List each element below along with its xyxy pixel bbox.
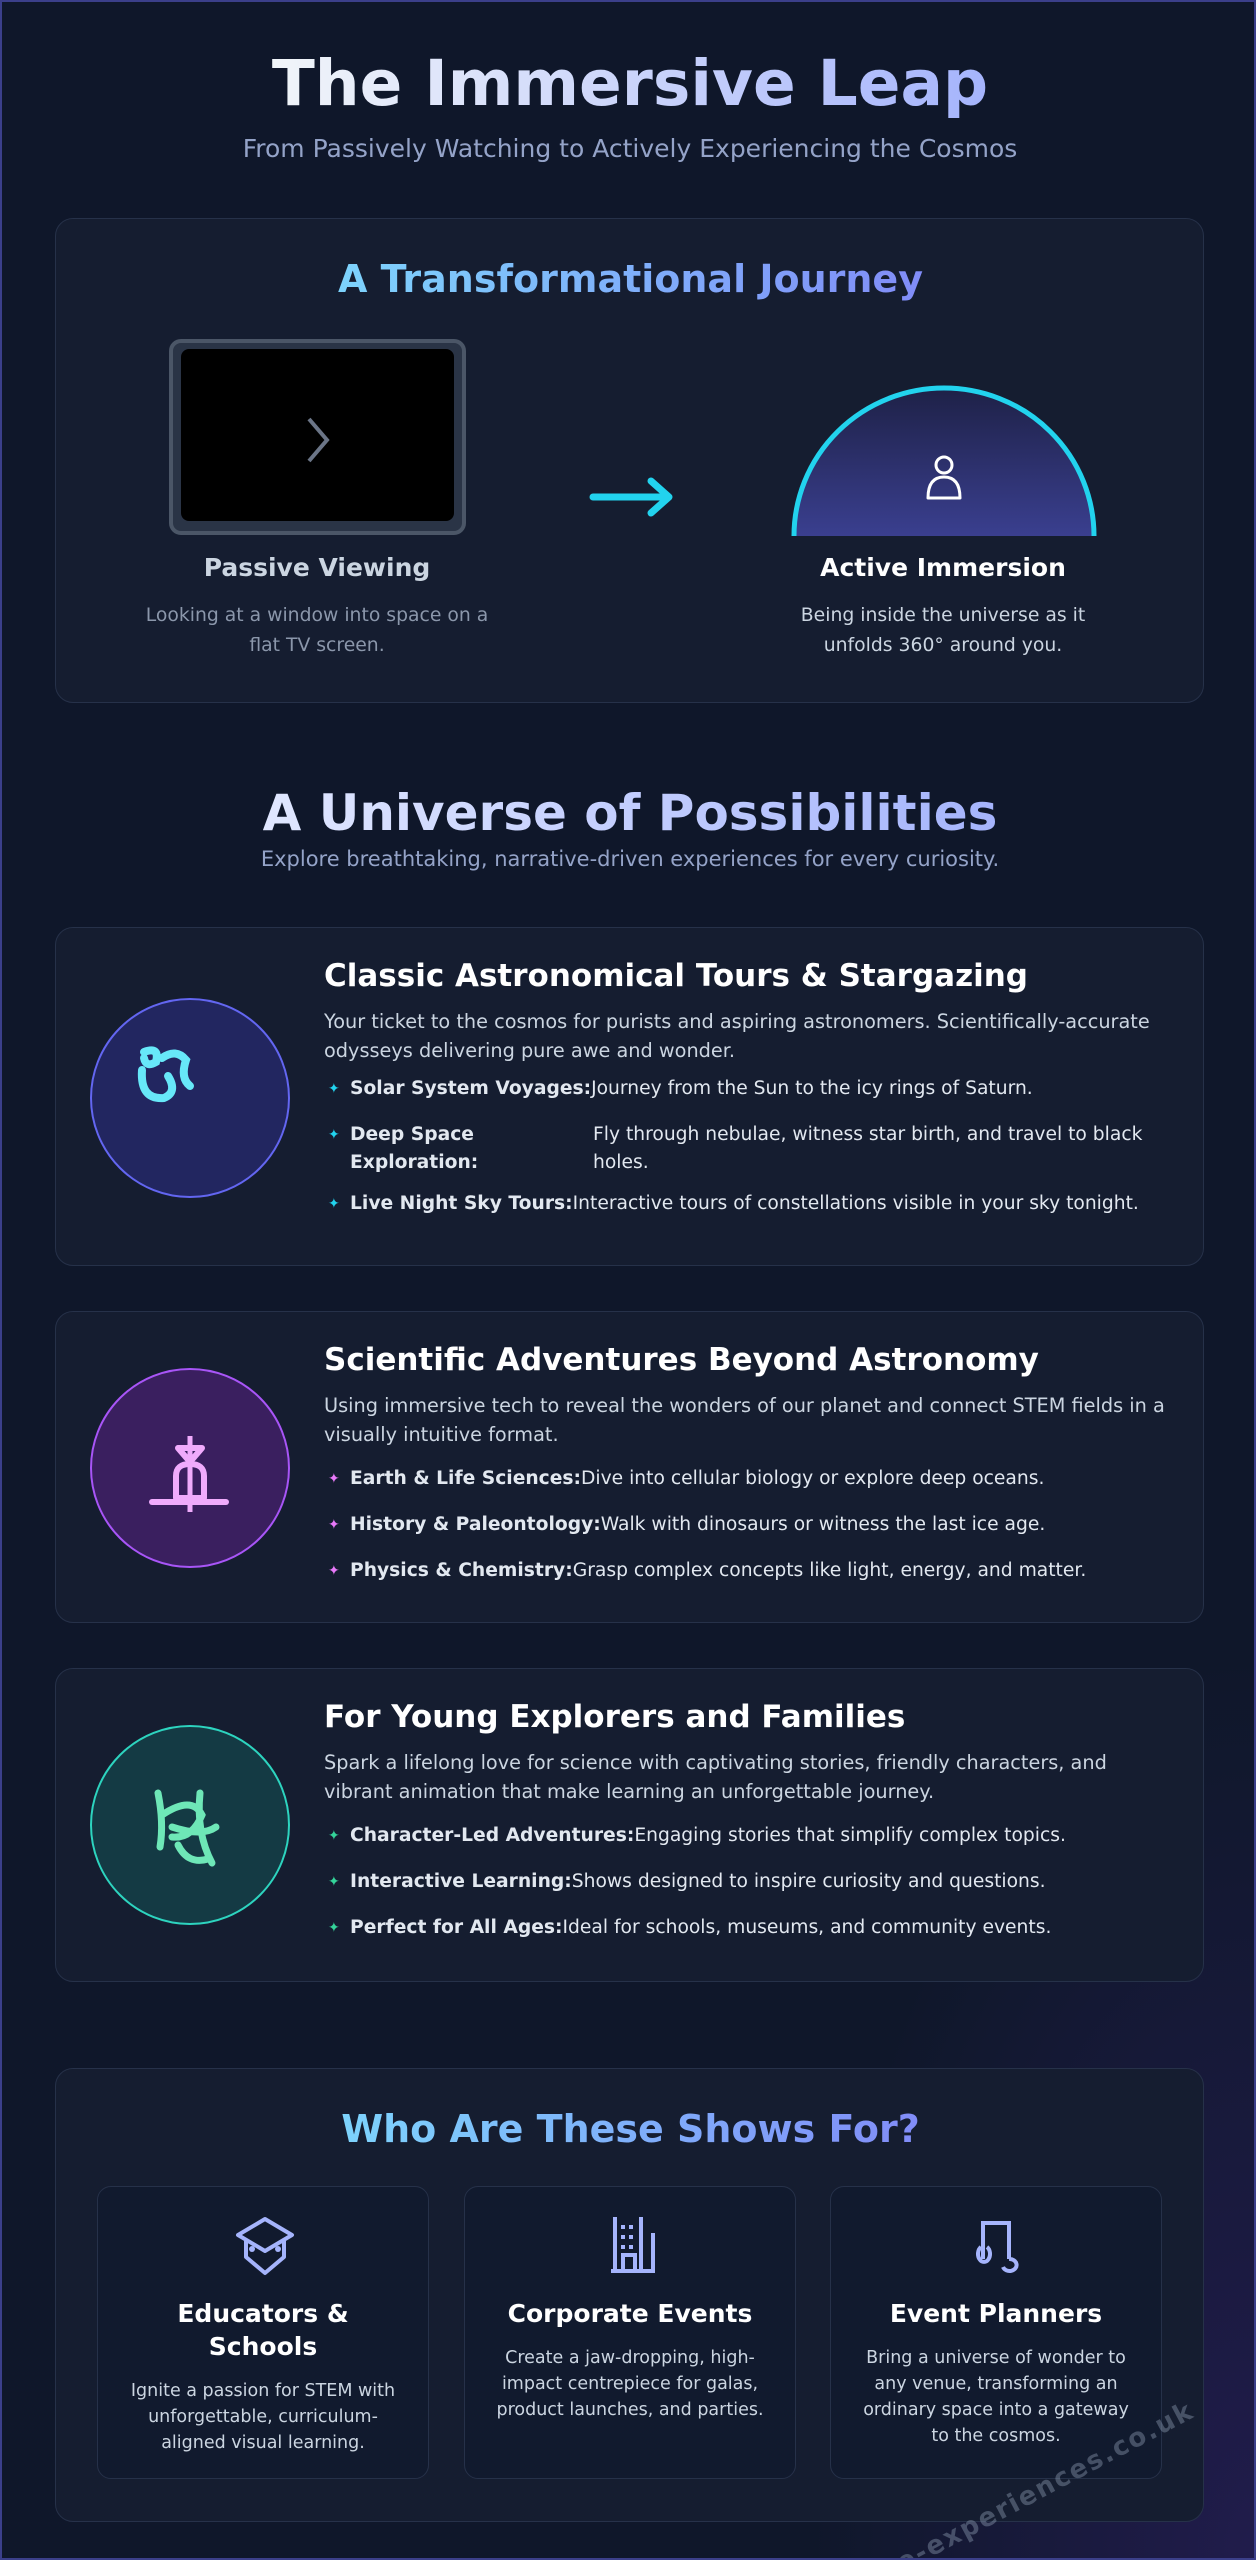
bullet: night sky <box>328 1193 1139 1214</box>
bullet: solar system: ✦ <box>328 1081 340 1097</box>
bullet: character-led: Engaging stories that simplify complex topics. <box>634 1825 1066 1846</box>
bullet: all ages: Perfect for All Ages: <box>350 1917 562 1938</box>
text: active description: Being inside the universe as it unfolds 360° around you. <box>801 605 1085 656</box>
heading: Who Are These Shows For? <box>341 2107 920 2151</box>
bullet: character-led <box>328 1825 1066 1846</box>
bullet: history <box>328 1514 1045 1535</box>
bullet: deep space: Fly through nebulae, witness star birth, and travel to black holes. <box>593 1124 1142 1173</box>
label: passive viewing: Passive Viewing <box>204 553 430 582</box>
bullet: earth <box>328 1468 1044 1489</box>
panel: scientific adventures <box>55 1311 1204 1623</box>
bullet: solar system: Journey from the Sun to the icy rings of Saturn. <box>591 1078 1033 1099</box>
bullet: deep space: Deep Space Exploration: <box>350 1124 478 1173</box>
icon: music note <box>976 2221 1019 2273</box>
bullet: history: History & Paleontology: <box>350 1514 601 1535</box>
panel: classic astronomical tours <box>55 927 1204 1266</box>
bullet: character-led: ✦ <box>328 1828 340 1844</box>
text: passive description: Looking at a window into space on a flat TV screen. <box>146 605 488 656</box>
bullet list <box>328 1468 1086 1581</box>
bullet: night sky: Live Night Sky Tours: <box>350 1193 573 1214</box>
description: Create a jaw-dropping, high-impact centrepiece for galas, product launches, and parties. <box>496 2348 764 2420</box>
bullet: physics <box>328 1560 1086 1581</box>
panel: who are these shows for <box>55 2068 1204 2522</box>
arrow <box>590 478 672 516</box>
card description: Your ticket to the cosmos for purists and aspiring astronomers. Scientifically-accurate odysseys delivering pure awe and wonder. <box>324 1010 1150 1062</box>
title: Event Planners <box>890 2299 1102 2328</box>
description: Bring a universe of wonder to any venue, transforming an ordinary space into a gateway to the cosmos. <box>863 2348 1129 2446</box>
bullet: history: ✦ <box>328 1517 340 1533</box>
card description: Spark a lifelong love for science with captivating stories, friendly characters, and vibrant animation that make learning an unforgettable journey. <box>324 1751 1107 1803</box>
bullet: solar system: Solar System Voyages: <box>350 1078 591 1099</box>
icon: astronomy circle <box>90 998 290 1198</box>
bullet: physics: Physics & Chemistry: <box>350 1560 573 1581</box>
heading: A Transformational Journey <box>338 257 923 301</box>
icon: building <box>611 2217 655 2273</box>
bullet: interactive: ✦ <box>328 1874 340 1890</box>
bullet: earth: ✦ <box>328 1471 340 1487</box>
card title: For Young Explorers and Families <box>324 1699 905 1735</box>
card title: Scientific Adventures Beyond Astronomy <box>324 1342 1039 1378</box>
title: Educators & <box>177 2299 349 2328</box>
bullet: night sky: Interactive tours of constellations visible in your sky tonight. <box>573 1193 1139 1214</box>
bullet: deep space: ✦ <box>328 1127 340 1143</box>
title <box>177 2299 349 2361</box>
bullet: physics: ✦ <box>328 1563 340 1579</box>
bullet: earth: Earth & Life Sciences: <box>350 1468 581 1489</box>
subtitle: explore: Explore breathtaking, narrative-driven experiences for every curiosity. <box>261 847 999 871</box>
title: The Immersive Leap <box>272 47 988 120</box>
bullet: earth: Dive into cellular biology or explore deep oceans. <box>581 1468 1044 1489</box>
title: Schools <box>209 2332 317 2361</box>
bullet: deep space <box>328 1124 1142 1173</box>
bullet: night sky: ✦ <box>328 1196 340 1212</box>
description: Ignite a passion for STEM with unforgettable, curriculum-aligned visual learning. <box>131 2381 395 2453</box>
icon: dome <box>792 386 1096 536</box>
bullet: interactive: Interactive Learning: <box>350 1871 572 1892</box>
card: corporate <box>464 2186 796 2479</box>
bullet: all ages <box>328 1917 1051 1938</box>
card: educators <box>97 2186 429 2479</box>
icon: science circle <box>90 1368 290 1568</box>
bullet: interactive: Shows designed to inspire curiosity and questions. <box>572 1871 1046 1892</box>
panel: transformational journey <box>55 218 1204 703</box>
icon: graduation <box>236 2217 294 2276</box>
bullet: solar system <box>328 1078 1033 1099</box>
card title: Classic Astronomical Tours & Stargazing <box>324 958 1028 994</box>
bullet list <box>328 1825 1066 1938</box>
bullet: all ages: Ideal for schools, museums, and community events. <box>562 1917 1051 1938</box>
heading: universe of possibilities: A Universe of Possibilities <box>263 784 997 842</box>
bullet: character-led: Character-Led Adventures: <box>350 1825 634 1846</box>
bullet: interactive <box>328 1871 1046 1892</box>
icon: tv screen <box>169 339 466 535</box>
subtitle: From Passively Watching to Actively Experiencing the Cosmos <box>243 134 1017 163</box>
title: Corporate Events <box>508 2299 752 2328</box>
bullet: all ages: ✦ <box>328 1920 340 1936</box>
bullet: history: Walk with dinosaurs or witness the last ice age. <box>601 1514 1045 1535</box>
bullet: physics: Grasp complex concepts like light, energy, and matter. <box>573 1560 1086 1581</box>
panel: young explorers <box>55 1668 1204 1982</box>
label: active immersion: Active Immersion <box>820 553 1066 582</box>
bullet list <box>328 1078 1142 1214</box>
icon: family circle <box>90 1725 290 1925</box>
card: planners <box>830 2186 1162 2479</box>
card description: Using immersive tech to reveal the wonders of our planet and connect STEM fields in a visually intuitive format. <box>324 1394 1165 1446</box>
